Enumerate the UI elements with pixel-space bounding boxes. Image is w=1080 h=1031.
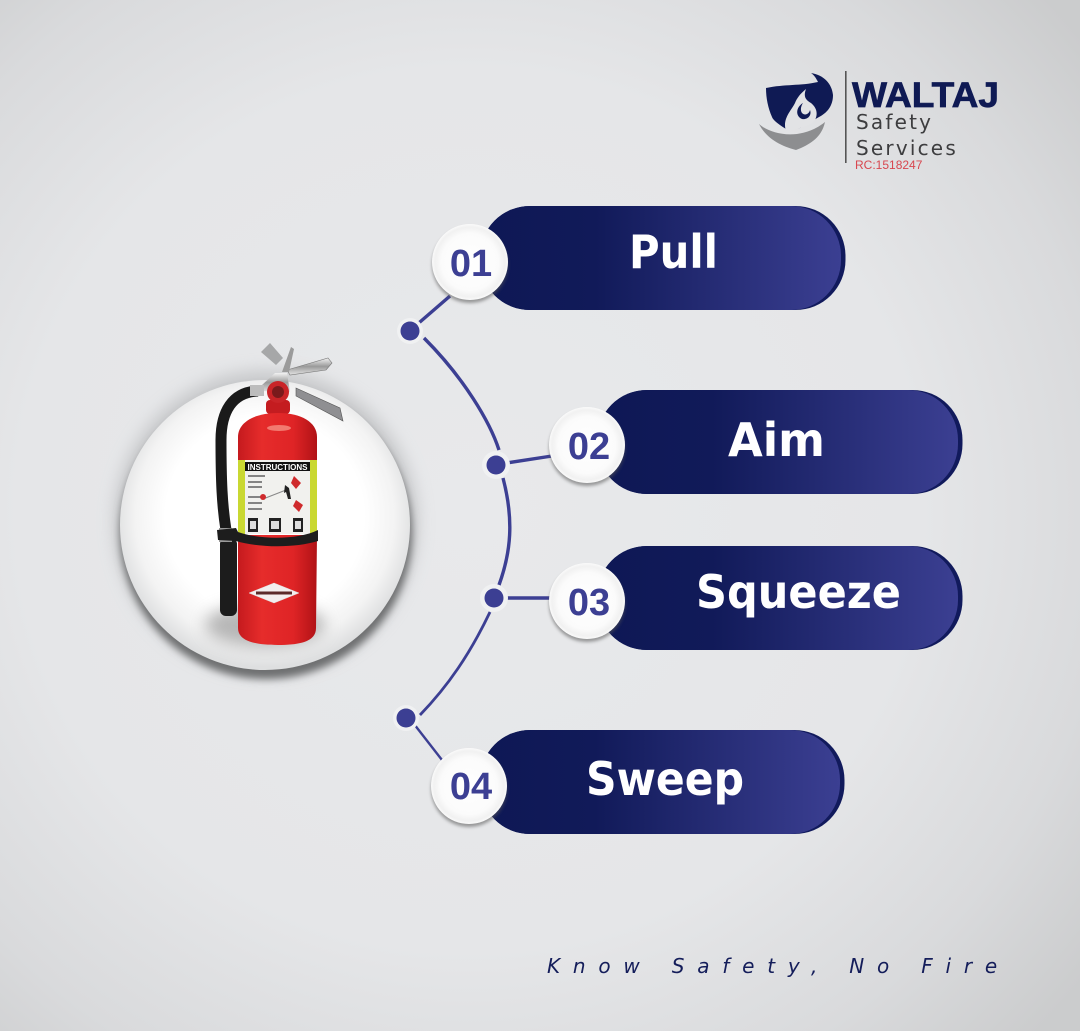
number badge: 02 [568, 426, 610, 468]
instruction label [238, 460, 317, 534]
timeline dot 1 [397, 318, 423, 344]
number badge: 04 [450, 766, 492, 808]
cylinder top valve [266, 400, 290, 414]
company logo [759, 71, 999, 172]
valve and pressure gauge [250, 373, 290, 403]
logo registration number: RC:1518247 [855, 158, 923, 172]
instruction label: INSTRUCTIONS [248, 463, 308, 472]
pull tag [261, 343, 283, 365]
floor shadow [205, 603, 325, 647]
pill [597, 546, 962, 650]
illustration: fire extinguisher [205, 343, 343, 647]
timeline dot 4 [393, 705, 419, 731]
logo subtitle: Safety: Safety [856, 110, 933, 134]
step label: Squeeze [696, 565, 901, 619]
upper handle [287, 358, 332, 375]
step 3: Squeeze [549, 546, 962, 650]
pill [480, 730, 844, 834]
icon: shield with flame [759, 73, 833, 150]
timeline dot 2 [482, 451, 510, 479]
logo divider [845, 71, 847, 163]
pull pin [282, 347, 294, 372]
step 2: Aim [549, 390, 962, 494]
number badge [549, 563, 625, 642]
step label: Pull [629, 225, 718, 279]
lower lever [296, 388, 343, 421]
white disc behind extinguisher [114, 370, 418, 679]
logo subtitle: Services: Services [856, 136, 958, 160]
step label: Sweep [586, 752, 744, 806]
number badge [431, 748, 507, 827]
cylinder body [238, 535, 317, 645]
hose [221, 391, 258, 530]
step 4: Sweep [431, 730, 844, 834]
pill [597, 390, 962, 494]
step 1: Pull [432, 206, 846, 310]
number badge [432, 224, 508, 303]
timeline dot 3 [480, 584, 508, 612]
logo wordmark: WALTAJ [852, 76, 999, 115]
mounting strap [217, 528, 318, 546]
number badge: 03 [568, 582, 610, 624]
slogan: Know Safety, No Fire [547, 954, 1010, 978]
timeline connector [393, 296, 552, 760]
pill [480, 206, 846, 310]
number badge: 01 [450, 243, 492, 285]
step label: Aim [728, 413, 825, 467]
brand diamond [249, 583, 299, 603]
number badge [549, 407, 625, 486]
